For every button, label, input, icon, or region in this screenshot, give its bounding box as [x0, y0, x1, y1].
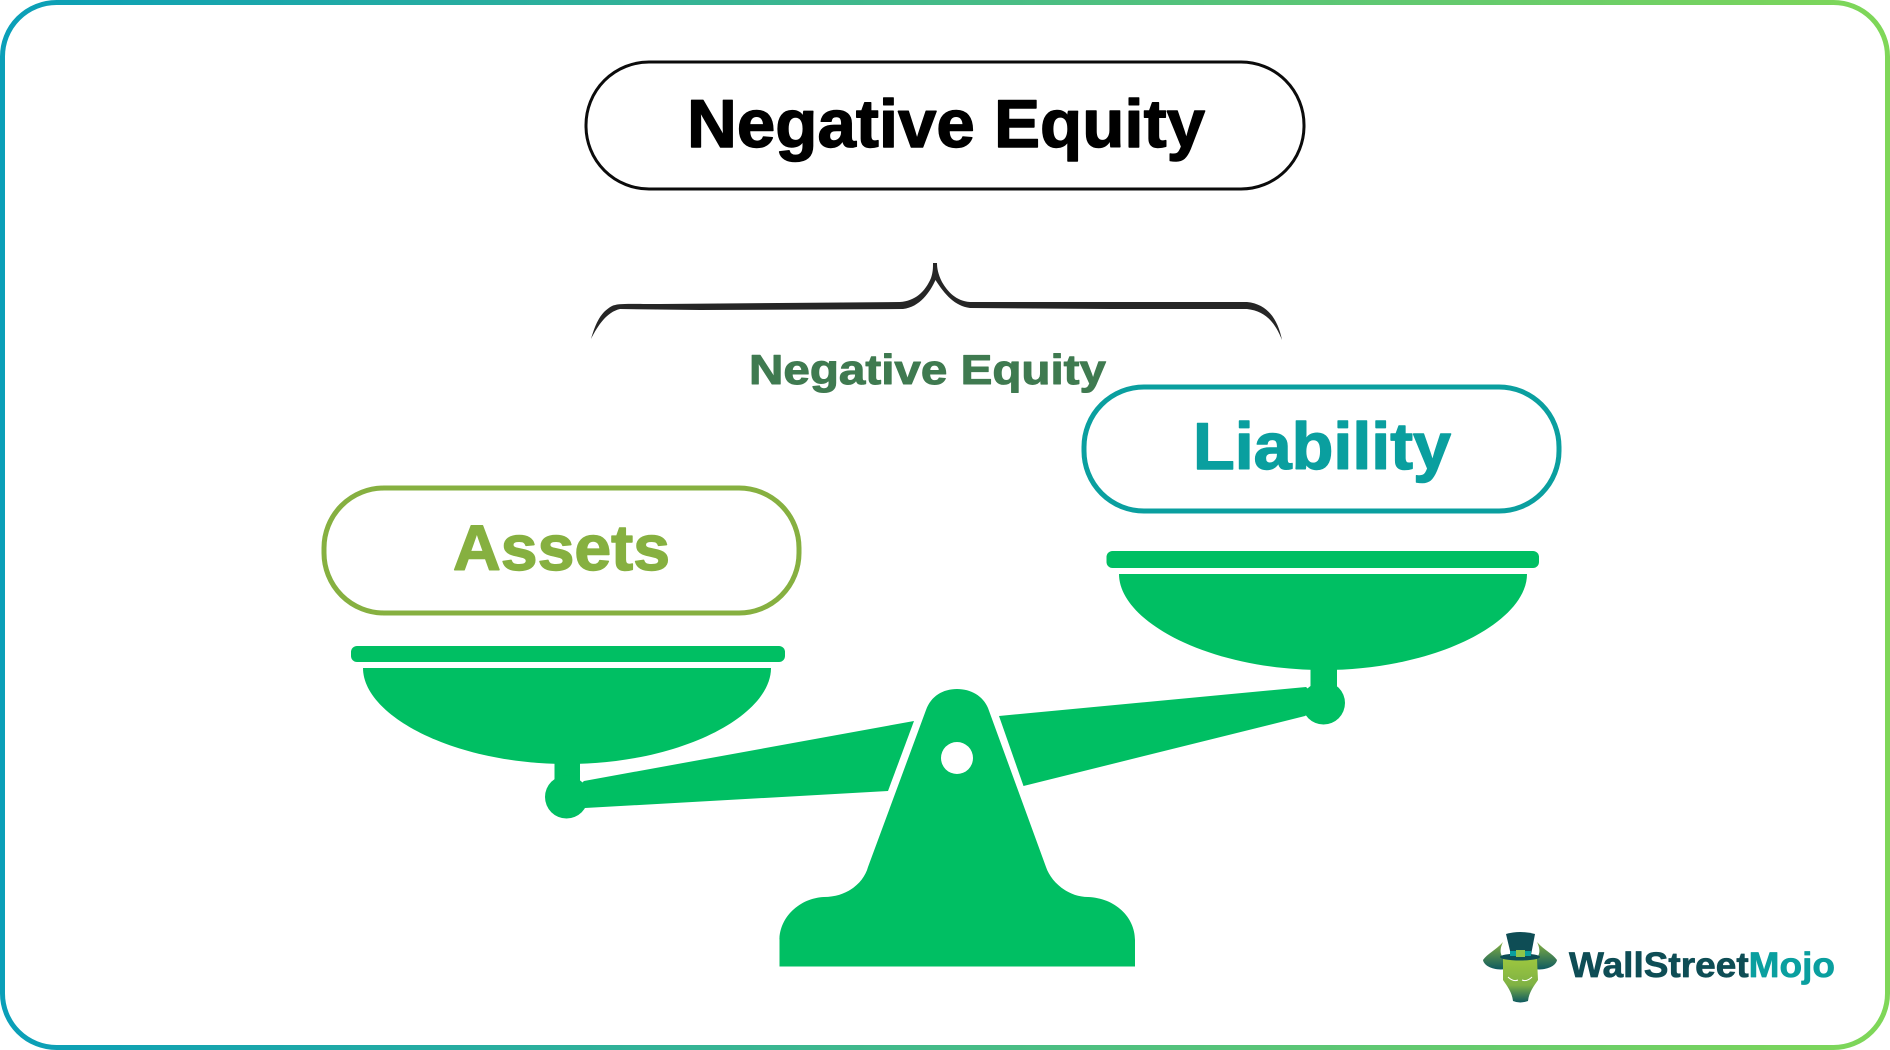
curly brace: [591, 263, 1282, 340]
assets pill: Assets: [453, 512, 670, 584]
title pill: Negative Equity: [687, 86, 1205, 162]
title pill: [586, 62, 1304, 189]
fulcrum: [780, 689, 1135, 966]
balance scale: [351, 551, 1539, 966]
liability pill: Liability: [1193, 409, 1451, 483]
left arm: [545, 721, 914, 818]
brace label: Negative Equity: [749, 346, 1107, 393]
wordmark: WallStreet Mojo: [1569, 946, 1835, 985]
right arm: [999, 682, 1345, 786]
logo: WallStreetMojo: [1483, 932, 1835, 1002]
assets pill: [324, 488, 799, 613]
icon: bull with top hat: [1483, 932, 1557, 1002]
left pan: [351, 646, 785, 782]
right pan: [1106, 551, 1539, 687]
liability pill: [1084, 387, 1559, 511]
